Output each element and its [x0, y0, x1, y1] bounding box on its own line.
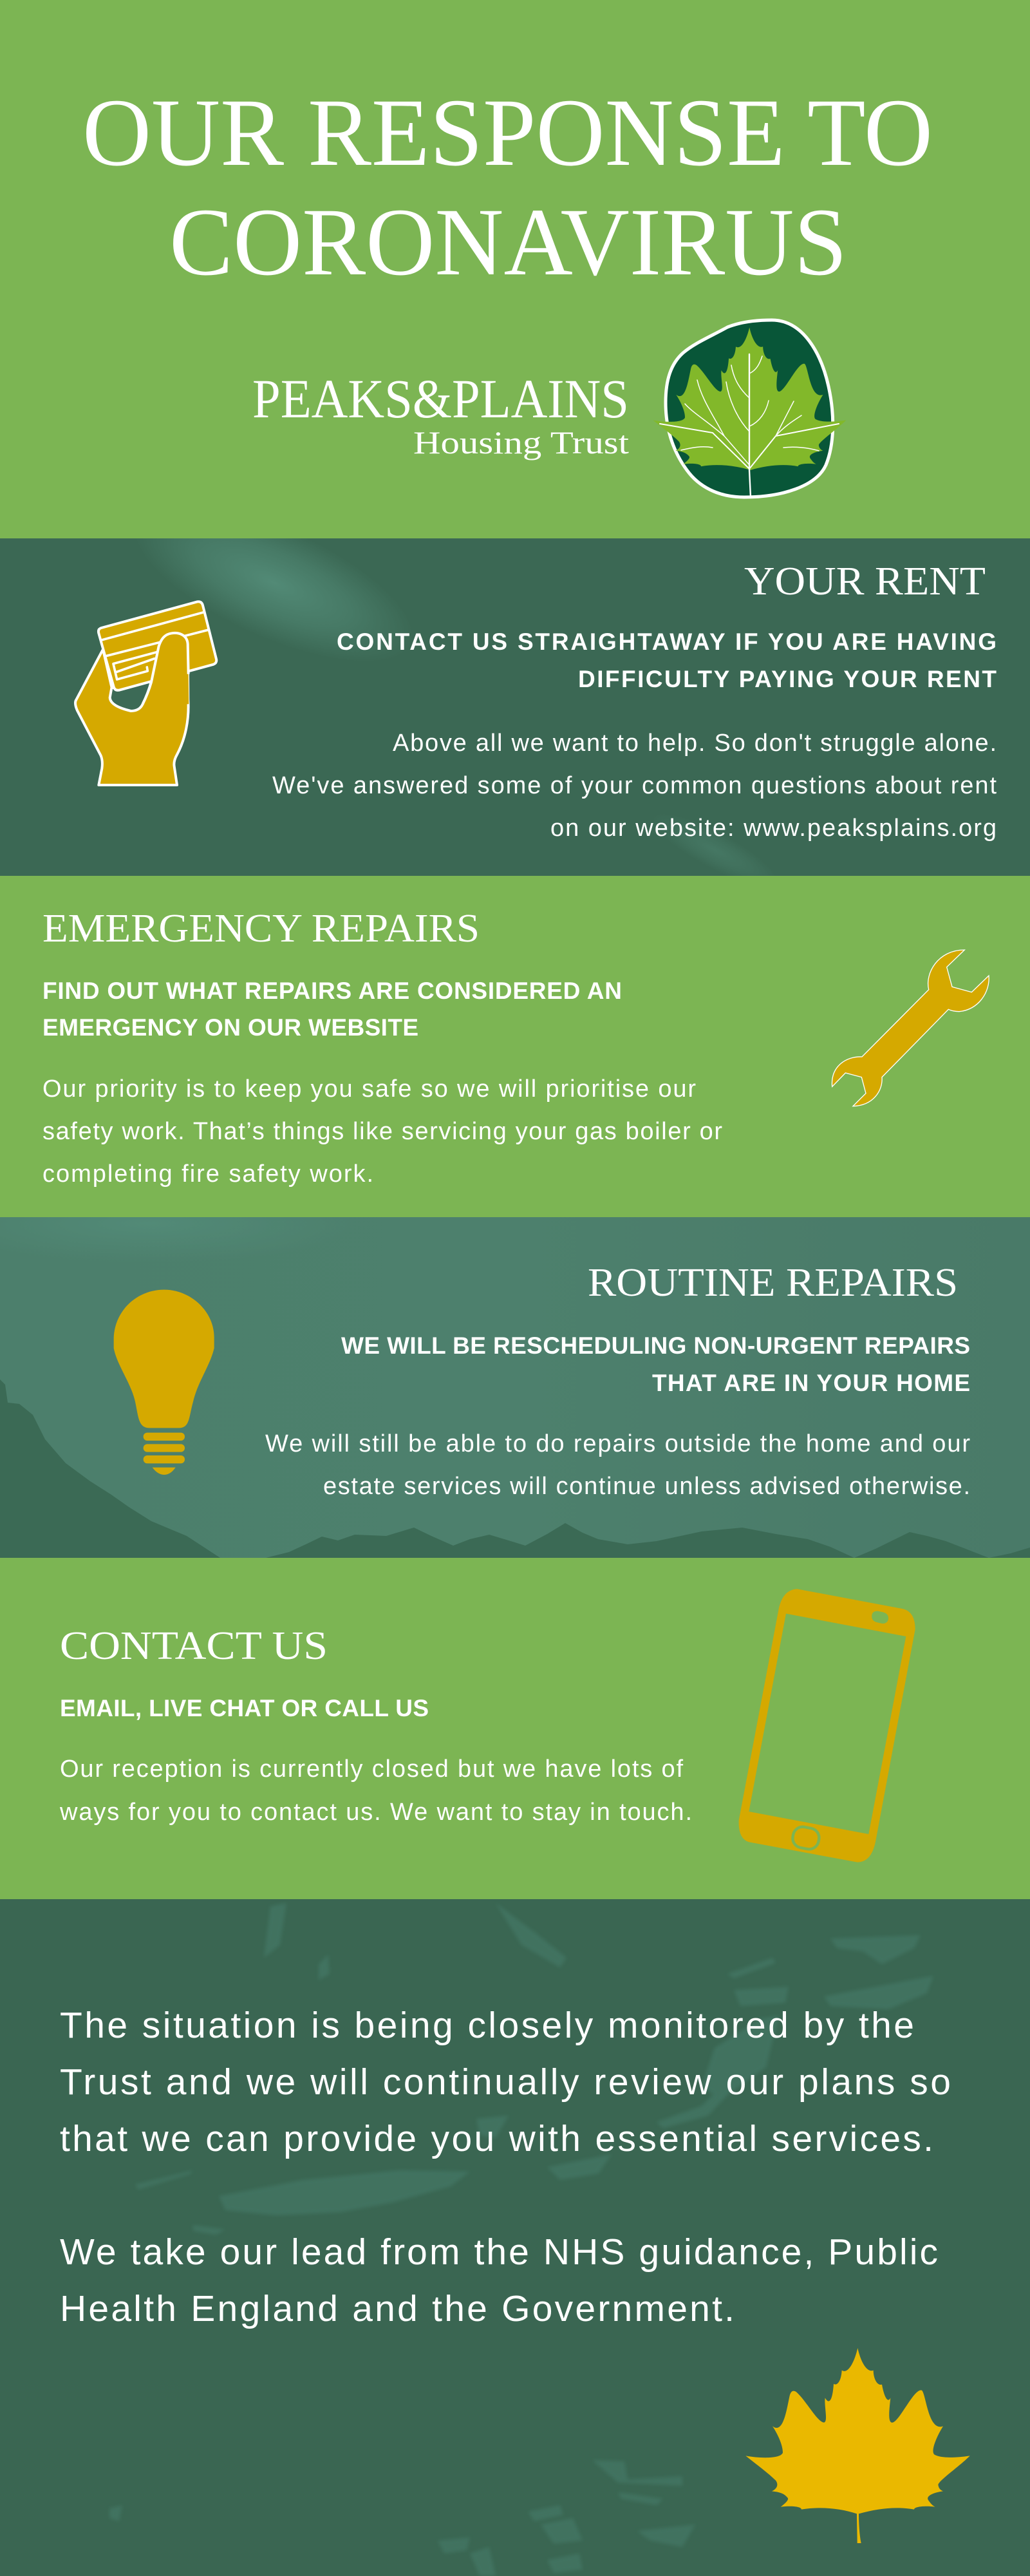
logo wordmark: Housing Trust	[413, 424, 629, 460]
subheading: your rent	[337, 629, 997, 692]
text block: closing statement: The situation is being closely monitored by the	[60, 2005, 914, 2046]
panel: contact us	[0, 1558, 1030, 1899]
text block: your rent: We've answered some of your common questions about rent	[272, 772, 997, 799]
icon: hand holding card	[75, 601, 216, 785]
text block: routine repairs: We will still be able to do repairs outside the home and our	[265, 1430, 970, 1457]
panel: emergency repairs	[0, 876, 1030, 1217]
subheading: emergency repairs: FIND OUT WHAT REPAIRS ARE CONSIDERED AN	[42, 978, 622, 1004]
icon: gold leaf	[745, 2348, 970, 2543]
mountains background	[0, 1379, 1030, 1558]
heading: emergency repairs: EMERGENCY REPAIRS	[42, 907, 480, 951]
subheading: emergency repairs: EMERGENCY ON OUR WEBSITE	[42, 1014, 418, 1041]
title	[82, 79, 933, 296]
text block: emergency repairs	[42, 1075, 722, 1188]
heading: contact us: CONTACT US	[60, 1624, 328, 1668]
subheading: routine repairs	[341, 1332, 970, 1396]
logo wordmark	[252, 368, 629, 460]
title: CORONAVIRUS	[169, 189, 847, 296]
text block: your rent	[272, 730, 997, 842]
subheading: emergency repairs	[42, 978, 622, 1041]
text block: routine repairs: estate services will continue unless advised otherwise.	[323, 1473, 970, 1500]
heading: routine repairs: ROUTINE REPAIRS	[588, 1261, 958, 1305]
text block: closing statement: that we can provide you with essential services.	[60, 2118, 933, 2159]
text block: routine repairs	[265, 1430, 970, 1500]
text block: closing statement	[60, 2005, 951, 2329]
subheading: your rent: DIFFICULTY PAYING YOUR RENT	[578, 666, 997, 692]
text block: closing statement: Health England and the Government.	[60, 2288, 735, 2329]
heading: your rent: YOUR RENT	[744, 560, 986, 603]
subheading: contact us: EMAIL, LIVE CHAT OR CALL US	[60, 1695, 429, 1721]
icon: smartphone	[739, 1589, 915, 1862]
subheading: routine repairs: WE WILL BE RESCHEDULING NON-URGENT REPAIRS	[341, 1332, 970, 1359]
title: OUR RESPONSE TO	[82, 79, 933, 186]
text block: emergency repairs: Our priority is to keep you safe so we will prioritise our	[42, 1075, 696, 1103]
panel: header	[0, 0, 1030, 538]
subheading: your rent: CONTACT US STRAIGHTAWAY IF YOU ARE HAVING	[337, 629, 997, 655]
panel: closing statement	[0, 1899, 1030, 2576]
logo wordmark: PEAKS&PLAINS	[252, 368, 629, 430]
panel: routine repairs	[0, 1185, 1030, 1558]
text block: closing statement: We take our lead from the NHS guidance, Public	[60, 2231, 938, 2273]
text block: contact us: ways for you to contact us. We want to stay in touch.	[59, 1799, 692, 1826]
text block: emergency repairs: safety work. That’s things like servicing your gas boiler or	[42, 1118, 722, 1145]
text block: your rent: on our website: www.peaksplains.org	[550, 815, 997, 842]
panel: your rent	[0, 538, 1030, 876]
icon: wrench	[832, 950, 989, 1106]
rocky texture background	[109, 1903, 933, 2576]
icon: light bulb	[114, 1290, 214, 1475]
icon: logo leaf emblem	[653, 320, 846, 497]
text block: contact us: Our reception is currently closed but we have lots of	[60, 1756, 683, 1783]
text block: contact us	[59, 1756, 692, 1826]
text block: closing statement: Trust and we will continually review our plans so	[60, 2061, 951, 2103]
subheading: routine repairs: THAT ARE IN YOUR HOME	[652, 1370, 970, 1396]
text block: your rent: Above all we want to help. So don't struggle alone.	[393, 730, 997, 757]
text block: emergency repairs: completing fire safety work.	[42, 1160, 373, 1188]
